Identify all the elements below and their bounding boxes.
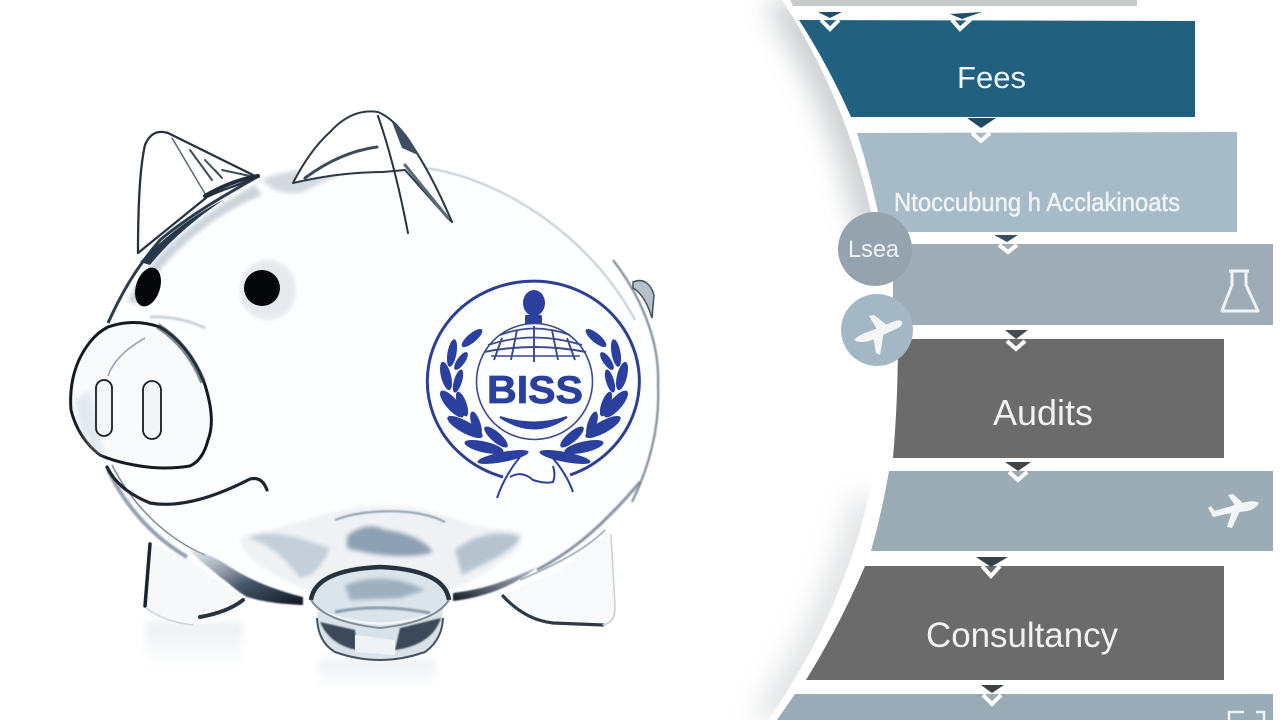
badge: Lsea: Lsea <box>848 236 900 263</box>
body shading <box>108 168 658 605</box>
icon: corner frame <box>1229 712 1264 720</box>
logo wordmark: BISS <box>487 369 583 412</box>
chevron: top right <box>950 12 982 29</box>
bar: airplane <box>871 471 1273 551</box>
nostril left <box>96 380 112 436</box>
bar: bottom partial <box>777 694 1273 720</box>
left ear <box>138 132 258 253</box>
process bars <box>777 0 1273 720</box>
leg accents <box>145 535 615 625</box>
bar: Audits <box>893 339 1224 458</box>
right leg <box>503 530 615 625</box>
bar: top partial <box>790 0 1137 6</box>
smile <box>107 467 267 504</box>
badge: Lsea <box>838 212 912 286</box>
snout <box>71 322 211 468</box>
logo ribbon <box>497 453 573 498</box>
bar: garbled label: Ntoccubung h Acclakinoats <box>894 187 1180 217</box>
bar: Fees: Fees <box>957 60 1026 95</box>
chevron: after flask bar <box>1005 330 1028 349</box>
chevron: top left <box>818 12 842 29</box>
piggy bank <box>71 111 658 692</box>
icon: flask <box>1222 271 1258 311</box>
bar: flask <box>893 244 1273 325</box>
left leg <box>145 543 243 625</box>
badge: airplane <box>841 294 913 366</box>
connector chevrons <box>818 12 1031 704</box>
nostril right <box>143 381 161 439</box>
laurel left <box>436 326 529 467</box>
belly glass window <box>241 506 522 592</box>
chevron: after airplane bar <box>976 557 1008 576</box>
bar: garbled label <box>857 132 1237 232</box>
BISS logo <box>427 281 639 498</box>
chevron: after Consultancy <box>981 685 1004 704</box>
white disk with inner shadow <box>756 0 871 720</box>
coin foot <box>311 567 449 660</box>
bar: Consultancy: Consultancy <box>926 616 1118 655</box>
bar: Audits: Audits <box>993 392 1093 433</box>
logo ring <box>427 281 639 477</box>
floor reflections <box>145 622 436 692</box>
logo globe <box>476 324 592 440</box>
right ear <box>293 111 452 233</box>
slot nub <box>633 281 654 318</box>
logo crown <box>523 290 545 324</box>
chevron: after Audits <box>1005 462 1031 480</box>
body <box>107 165 655 604</box>
bar: Fees <box>799 20 1195 117</box>
bar: Consultancy <box>806 566 1224 680</box>
chevron: after garbled bar <box>994 235 1018 252</box>
laurel right <box>539 326 632 467</box>
logo ribbon text band <box>500 417 567 428</box>
chevron: after Fees <box>967 118 996 141</box>
eyes <box>130 260 296 320</box>
icon: airplane <box>1208 494 1259 528</box>
